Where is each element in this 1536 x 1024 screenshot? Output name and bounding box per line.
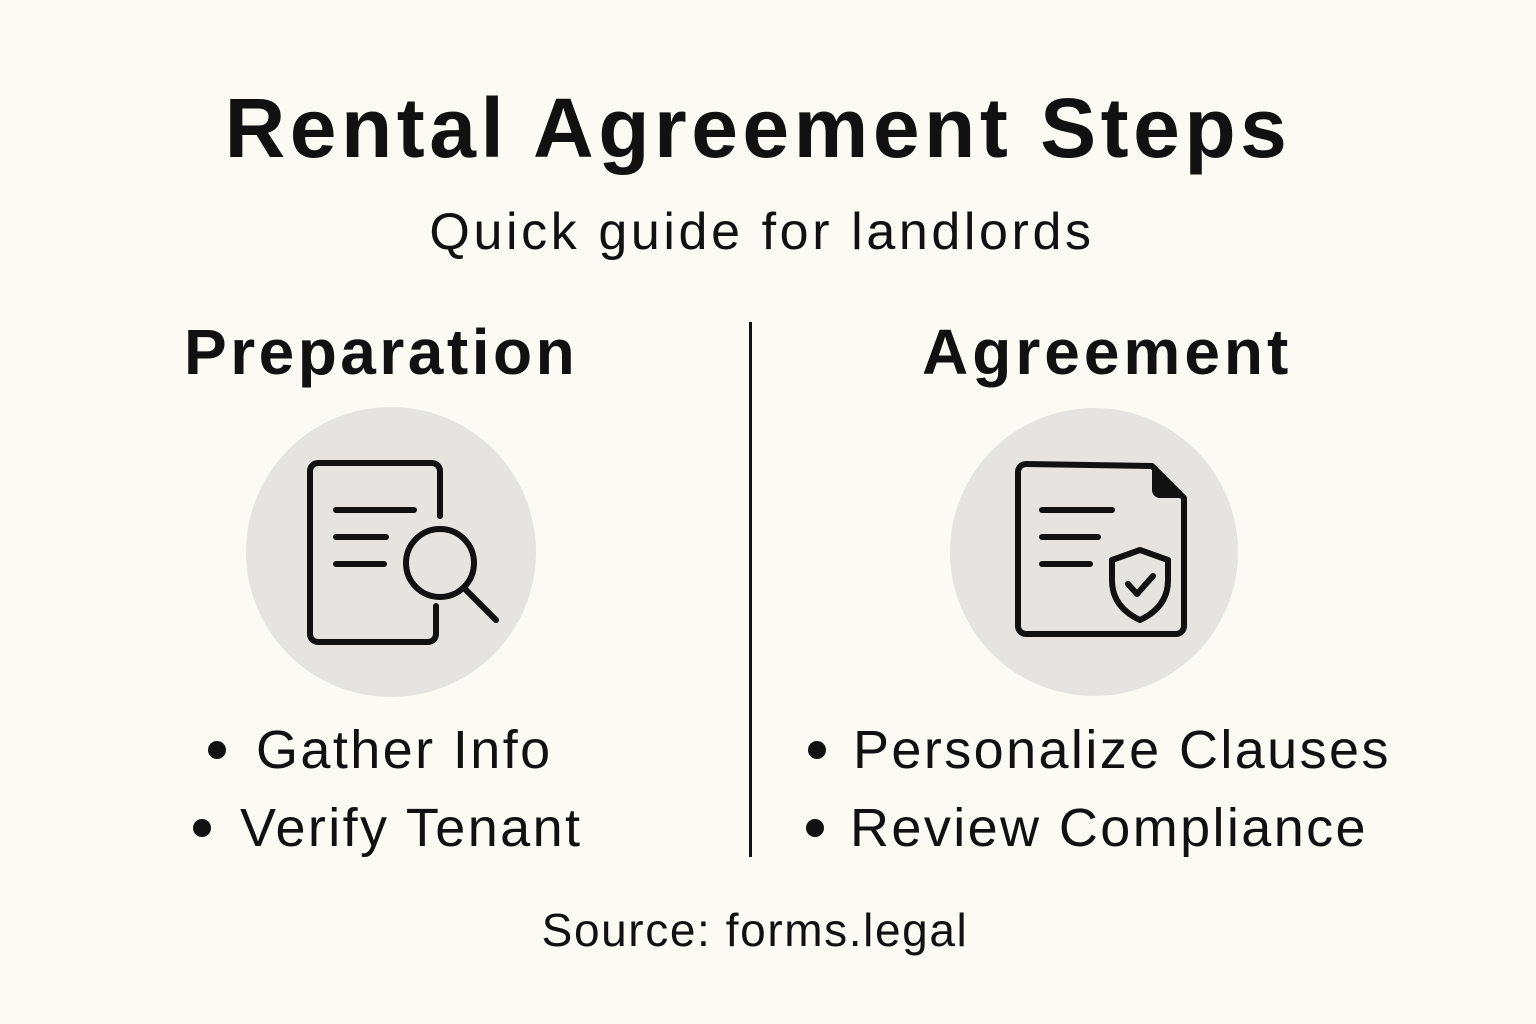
list: preparation: Verify Tenant bbox=[240, 798, 582, 858]
icon: document with shield bbox=[950, 408, 1238, 696]
heading: Preparation: Preparation bbox=[184, 316, 578, 388]
title: Rental Agreement Steps bbox=[225, 81, 1291, 175]
list: agreement: Review Compliance bbox=[850, 798, 1368, 858]
list: agreement: Personalize Clauses bbox=[853, 720, 1391, 780]
list: agreement bbox=[806, 720, 1391, 858]
icon: document with magnifier bbox=[246, 407, 536, 697]
subtitle: Quick guide for landlords bbox=[429, 203, 1095, 261]
divider line bbox=[749, 322, 752, 857]
list: preparation bbox=[193, 720, 582, 858]
source: Source: forms.legal bbox=[542, 904, 968, 956]
list: preparation: Gather Info bbox=[256, 720, 553, 780]
heading: Agreement: Agreement bbox=[922, 316, 1292, 388]
